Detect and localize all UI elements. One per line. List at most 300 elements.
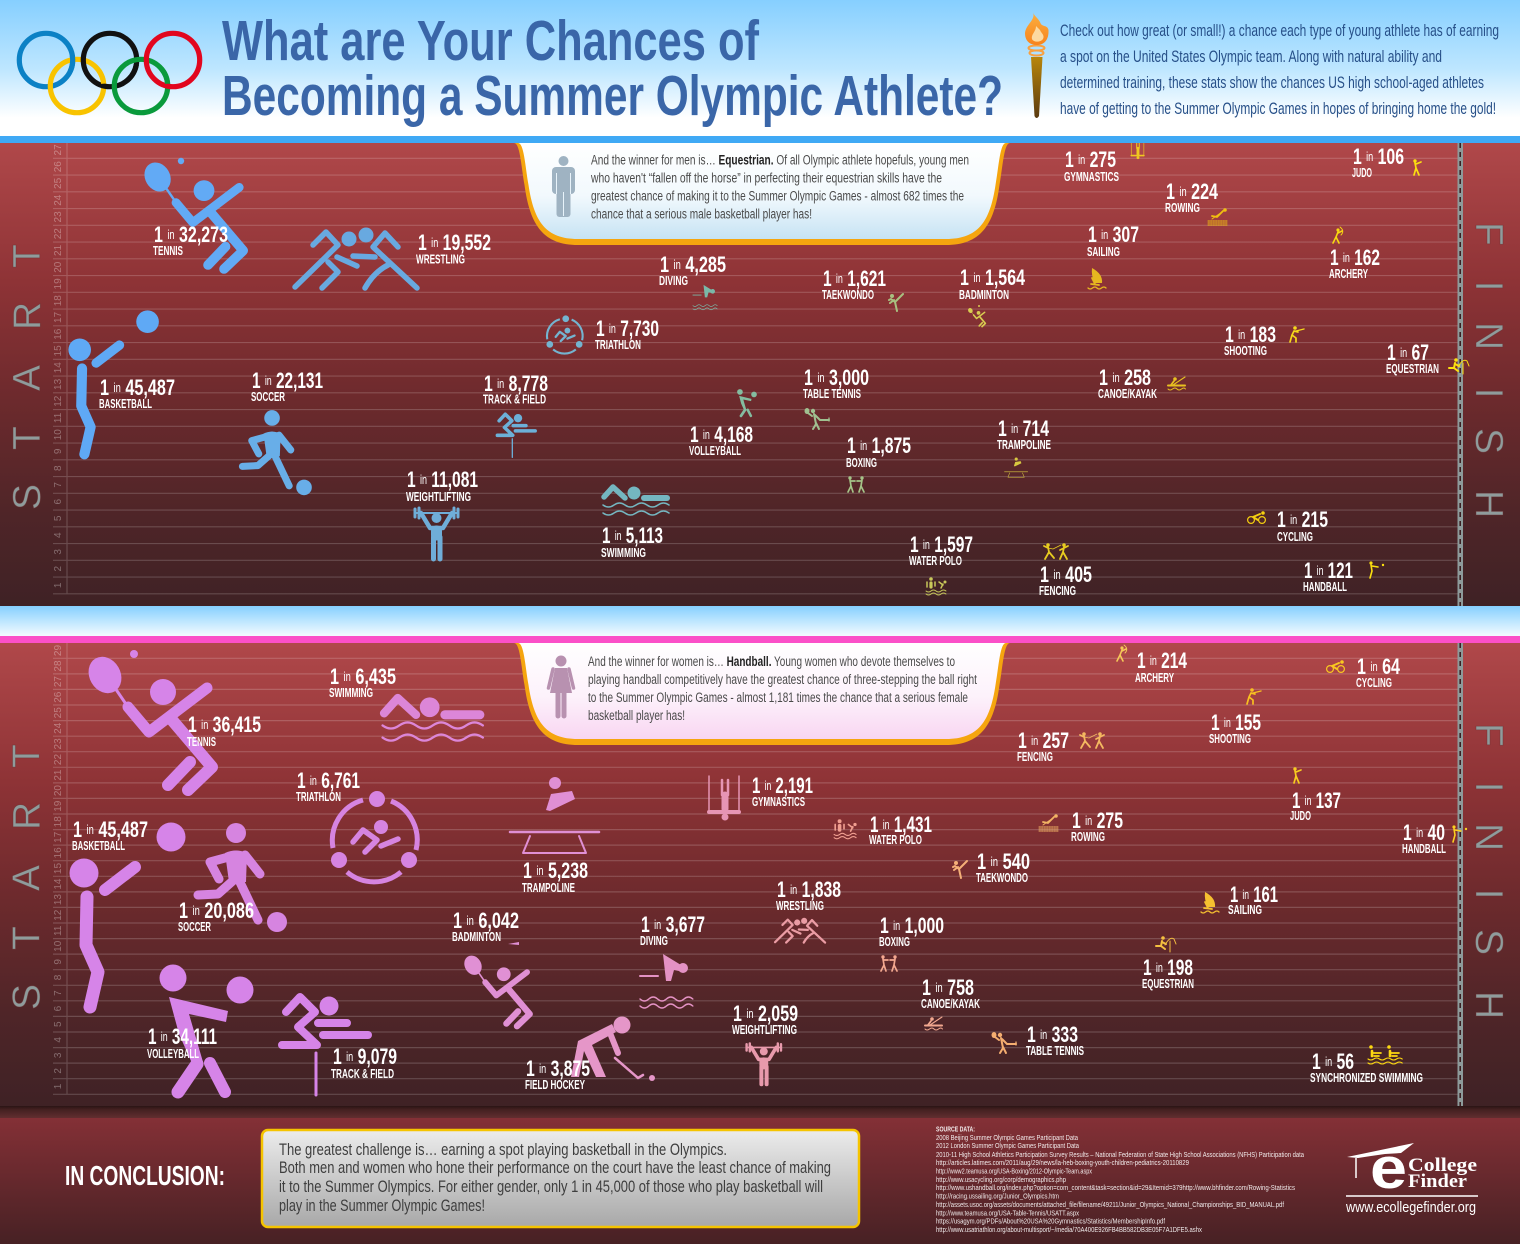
lane numbers: 9 — [53, 959, 64, 965]
sport: sailing — [1201, 882, 1278, 917]
lane numbers: 3 — [53, 549, 64, 555]
icon: table tennis — [992, 1032, 1016, 1053]
stat: basketball — [99, 375, 175, 411]
lane numbers: 25 — [53, 177, 64, 189]
lane numbers: 29 — [53, 645, 64, 656]
stat: fencing: FENCING — [1017, 750, 1053, 764]
sport: field hockey — [525, 1016, 655, 1092]
icon: shooting — [1247, 688, 1261, 704]
stat: wrestling — [776, 877, 841, 913]
source data: http://www.ushandball.org/index.php?option=com_content&task=section&id=29&Itemid=379http://www.bhfinder.com/Rowing-Statistics — [936, 1185, 1295, 1192]
icon: handball — [1369, 561, 1384, 578]
stat: fencing — [1017, 728, 1069, 764]
stat: taekwondo: 540 — [998, 849, 1030, 874]
stat: equestrian: 67 — [1407, 340, 1429, 365]
sport: handball — [1303, 558, 1384, 594]
stat: swimming: 1 — [602, 523, 615, 548]
stat: boxing: in — [860, 438, 867, 453]
sport: handball — [1402, 820, 1467, 856]
stat: weightlifting: 2,059 — [754, 1001, 798, 1026]
sport: shooting — [1224, 322, 1304, 358]
icon: boxing — [848, 476, 864, 492]
stat: sailing: SAILING — [1087, 245, 1120, 259]
sport: diving — [659, 252, 726, 310]
lane numbers: 24 — [53, 194, 64, 206]
source data: SOURCE DATA: — [936, 1126, 975, 1134]
icon: boxing — [881, 955, 897, 971]
sport: judo — [1352, 144, 1421, 180]
stat: swimming: 1 — [330, 664, 343, 689]
sport: fencing — [1039, 543, 1092, 598]
stat: tennis: 36,415 — [208, 712, 261, 737]
icon: cycling — [1248, 511, 1265, 523]
callout: women's winner — [514, 643, 1010, 745]
icon: synchronized swimming — [1368, 1045, 1402, 1064]
icon: olympic rings — [19, 33, 200, 113]
stat: table tennis — [1026, 1022, 1084, 1058]
stat: canoe: CANOE/KAYAK — [1098, 387, 1157, 401]
stat: fencing: FENCING — [1039, 584, 1076, 598]
stat: judo: 1 — [1292, 788, 1305, 813]
stat: diving: in — [654, 917, 661, 932]
stat: equestrian: EQUESTRIAN — [1142, 977, 1194, 991]
sport: boxing — [879, 913, 944, 971]
stat: wrestling: 1,838 — [797, 877, 841, 902]
stat: table tennis: 3,000 — [825, 365, 869, 390]
sport: taekwondo — [822, 266, 903, 311]
stat: handball: HANDBALL — [1402, 842, 1446, 856]
lane numbers: 2 — [53, 565, 64, 571]
sport: swimming — [329, 664, 483, 741]
sport: equestrian — [1142, 936, 1194, 991]
stat: badminton: in — [467, 913, 474, 928]
stat: soccer — [251, 368, 323, 404]
stat: boxing: 1,875 — [867, 433, 911, 458]
stat: canoe — [1098, 365, 1157, 401]
sport: canoe/kayak — [1098, 365, 1186, 401]
sport: badminton — [959, 265, 1025, 327]
lane numbers: 10 — [53, 429, 64, 440]
stat: judo: JUDO — [1290, 809, 1311, 823]
sport: wrestling — [295, 228, 491, 288]
stat: sailing — [1087, 222, 1139, 259]
sport: soccer — [178, 823, 287, 934]
stat: gymnastics: GYMNASTICS — [1064, 170, 1119, 184]
stat: gymnastics: 275 — [1085, 147, 1116, 172]
stat: basketball: 45,487 — [94, 817, 148, 842]
stat: canoe: in — [1112, 370, 1120, 385]
stat: cycling: CYCLING — [1277, 530, 1313, 544]
intro text — [1060, 21, 1499, 118]
lane numbers: 1 — [53, 1083, 64, 1089]
icon: wrestling — [295, 228, 417, 288]
stat: archery: ARCHERY — [1329, 267, 1368, 281]
stat: archery: 1 — [1137, 648, 1150, 673]
callout text: And the winner for men is… Equestrian. Of all Olympic athlete hopefuls, young men — [591, 152, 969, 168]
source data: http://racing.ussailing.org/Junior_Olympics.htm — [936, 1194, 1059, 1200]
sport: canoe/kayak — [921, 975, 980, 1030]
icon: sailing — [1088, 268, 1106, 289]
stat: tennis: TENNIS — [187, 735, 216, 749]
sport: table tennis — [803, 365, 869, 429]
divider band — [0, 606, 1520, 636]
stat: equestrian — [1386, 340, 1439, 376]
stat: archery: ARCHERY — [1135, 671, 1174, 685]
callout text: And the winner for women is… Handball. Young women who devote themselves to — [588, 654, 955, 669]
stat: diving: 1 — [660, 252, 673, 277]
stat: badminton: in — [973, 270, 981, 285]
stat: cycling: in — [1370, 659, 1378, 674]
stat: track and field: TRACK & FIELD — [483, 392, 546, 406]
stat: rowing — [1165, 179, 1218, 215]
stat: soccer: 1 — [179, 898, 192, 923]
stat: field hockey: FIELD HOCKEY — [525, 1078, 585, 1092]
lane numbers: 10 — [53, 940, 64, 952]
icon: water polo — [834, 819, 857, 839]
sport: triathlon — [546, 315, 659, 354]
finish label: FINISH — [1467, 222, 1510, 518]
stat: badminton: BADMINTON — [452, 930, 501, 944]
icon: volleyball — [160, 964, 254, 1092]
stat: triathlon: in — [609, 321, 616, 336]
stat: tennis: in — [167, 227, 175, 242]
sport: judo — [1290, 767, 1341, 823]
lane numbers: 12 — [53, 909, 64, 921]
stat: rowing: ROWING — [1071, 830, 1105, 844]
conclusion box: Both men and women who hone their performance on the court have the least chance of making — [279, 1158, 831, 1177]
source data: 2012 London Summer Olympic Games Participant Data — [936, 1143, 1079, 1150]
stat: wrestling: in — [431, 235, 438, 250]
stat: weightlifting: 1 — [407, 467, 420, 492]
stat: gymnastics: GYMNASTICS — [752, 795, 805, 809]
stat: judo — [1352, 144, 1404, 180]
icon: gymnastics — [709, 776, 739, 820]
stat: judo: 1 — [1353, 144, 1366, 169]
sport: diving — [640, 912, 705, 1008]
stat: swimming — [329, 664, 396, 700]
icon: male figure — [552, 156, 575, 217]
source data: http://www.usacycling.org/corp/demographics.php — [936, 1177, 1066, 1184]
stat: rowing: in — [1179, 184, 1187, 199]
stat: handball: HANDBALL — [1303, 580, 1347, 594]
stat: soccer: SOCCER — [251, 390, 285, 404]
stat: shooting: 183 — [1245, 322, 1276, 347]
stat: wrestling: 1 — [418, 230, 431, 255]
sport: triathlon — [296, 768, 417, 882]
icon: triathlon — [331, 791, 417, 882]
lane numbers: 24 — [53, 722, 64, 734]
stat: boxing: BOXING — [846, 456, 877, 470]
divider strip: blue — [0, 136, 1520, 143]
stat: judo — [1290, 788, 1341, 823]
stat: synchronized swimming: SYNCHRONIZED SWIMMING — [1310, 1071, 1423, 1085]
stat: rowing: 224 — [1187, 179, 1218, 204]
sport: fencing — [1017, 728, 1104, 764]
icon: wrestling — [775, 918, 825, 943]
callout text: basketball player has! — [588, 708, 685, 723]
stat: shooting: in — [1238, 327, 1245, 342]
callout text — [590, 152, 969, 222]
stat: table tennis: 1 — [1027, 1022, 1040, 1047]
stat: sailing — [1228, 882, 1278, 917]
icon: swimming — [603, 486, 669, 515]
icon: badminton — [967, 305, 985, 327]
sport: boxing — [846, 433, 911, 492]
sport: cycling — [1327, 654, 1400, 690]
logo: eCollege Finder: e — [1370, 1136, 1407, 1201]
lane numbers: 12 — [53, 395, 64, 407]
icon: triathlon — [546, 315, 583, 354]
lane numbers: 14 — [53, 878, 64, 890]
stat: swimming: 6,435 — [351, 664, 396, 689]
lane numbers: 8 — [53, 974, 64, 980]
icon: soccer — [198, 823, 287, 932]
lane numbers: 26 — [53, 691, 64, 703]
stat: diving — [640, 912, 705, 948]
sport: equestrian — [1386, 340, 1469, 376]
stat: equestrian: in — [1400, 345, 1407, 360]
start label: START — [6, 244, 49, 510]
stat: weightlifting: in — [420, 472, 427, 487]
lane numbers: 11 — [53, 412, 64, 423]
lane numbers: 28 — [53, 660, 64, 672]
stat: diving: 3,677 — [661, 912, 705, 937]
sport: soccer — [242, 368, 323, 495]
icon: weightlifting — [747, 1043, 781, 1084]
stat: wrestling: 1 — [777, 877, 790, 902]
stat: rowing: 275 — [1092, 808, 1123, 833]
stat: field hockey — [525, 1056, 590, 1092]
lane numbers: 18 — [53, 816, 64, 827]
stat: rowing: 1 — [1166, 179, 1179, 204]
icon: diving — [693, 285, 717, 310]
logo: eCollege Finder: Finder — [1408, 1171, 1468, 1192]
icon: tennis — [82, 650, 212, 790]
stat: badminton: 1 — [453, 908, 466, 933]
stat: trampoline: in — [1011, 421, 1018, 436]
sport: badminton — [452, 908, 530, 1026]
stat: taekwondo: in — [991, 854, 998, 869]
logo: eCollege Finder — [1345, 1136, 1478, 1216]
title: Becoming a Summer Olympic Athlete? — [222, 64, 1003, 128]
stat: basketball: in — [114, 380, 121, 395]
stat: trampoline: 1 — [998, 416, 1011, 441]
stat: canoe — [921, 975, 980, 1011]
stat: tennis: 1 — [154, 222, 167, 247]
stat: taekwondo: 1 — [977, 849, 990, 874]
sport: water polo — [834, 812, 932, 847]
stat: fencing: in — [1031, 733, 1038, 748]
lane numbers: 15 — [53, 863, 64, 874]
stat: badminton: BADMINTON — [959, 288, 1009, 302]
icon: fencing — [1080, 732, 1104, 748]
lane numbers: 5 — [53, 1021, 64, 1027]
stat: weightlifting — [406, 467, 478, 504]
stat: triathlon: 1 — [596, 316, 609, 341]
stat: basketball: 1 — [73, 817, 86, 842]
stat: archery — [1135, 648, 1187, 685]
stat: table tennis: TABLE TENNIS — [803, 387, 861, 401]
stat: volleyball: 1 — [690, 422, 703, 447]
stat: boxing: in — [893, 918, 900, 933]
stat: canoe: CANOE/KAYAK — [921, 997, 980, 1011]
lane numbers: 7 — [53, 990, 64, 996]
stat: wrestling: in — [790, 882, 797, 897]
stat: tennis — [153, 222, 228, 258]
stat: table tennis: TABLE TENNIS — [1026, 1044, 1084, 1058]
lane numbers: 20 — [53, 785, 64, 796]
icon: soccer — [242, 410, 312, 495]
stat: shooting: 155 — [1231, 710, 1261, 735]
stat: trampoline — [997, 416, 1051, 452]
sport: archery — [1329, 227, 1380, 281]
stat: fencing — [1039, 562, 1092, 598]
stat: handball: 1 — [1403, 820, 1416, 845]
icon: diving — [640, 954, 693, 1008]
conclusion box: it to the Summer Olympics. For either gender, only 1 in 45,000 of those who play basketball will — [279, 1177, 823, 1196]
stat: shooting: 1 — [1211, 710, 1224, 735]
callout text: who haven't “fallen off the horse” in perfecting their equestrian skills have the — [590, 170, 942, 186]
source data: http://www.usatriathlon.org/about-multisport/~/media/70A400E926FB4BB582DB3E05F7A1DFE5.ashx — [936, 1227, 1202, 1234]
stat: water polo — [869, 812, 932, 847]
stat: diving: DIVING — [659, 274, 688, 288]
icon: equestrian — [1156, 936, 1176, 952]
icon: shooting — [1290, 326, 1304, 342]
source data: 2008 Beijing Summer Olympic Games Participant Data — [936, 1135, 1078, 1142]
stat: sailing: 307 — [1108, 222, 1139, 247]
stat: canoe: 758 — [943, 975, 974, 1000]
stat: soccer: 20,086 — [200, 898, 254, 923]
stat: fencing: 257 — [1038, 728, 1069, 753]
stat: soccer: 22,131 — [272, 368, 323, 393]
stat: taekwondo — [822, 266, 886, 302]
lane numbers: 19 — [53, 278, 64, 289]
stat: gymnastics: 1 — [1065, 147, 1078, 172]
lane numbers: 17 — [53, 311, 64, 323]
stat: weightlifting: WEIGHTLIFTING — [732, 1023, 797, 1037]
stat: sailing: 1 — [1230, 882, 1243, 907]
callout text — [588, 654, 977, 723]
icon: track and field — [282, 996, 368, 1095]
stat: equestrian: in — [1156, 960, 1163, 975]
stat: volleyball: 4,168 — [710, 422, 753, 447]
conclusion box: The greatest challenge is… earning a spot playing basketball in the Olympics. — [279, 1140, 727, 1159]
panel: men — [0, 140, 1520, 606]
stat: basketball — [72, 817, 148, 853]
lane numbers: 16 — [53, 328, 64, 340]
stat: canoe: in — [935, 980, 943, 995]
icon: field hockey — [571, 1016, 655, 1081]
stat: water polo: WATER POLO — [909, 554, 962, 568]
source data: http://www2.teamusa.org/USA-Boxing/2012-Olympic-Team.aspx — [936, 1168, 1092, 1176]
stat: badminton — [452, 908, 519, 944]
lane numbers: 4 — [53, 532, 64, 538]
icon: female figure — [548, 656, 574, 716]
icon: judo — [1293, 767, 1301, 783]
lane numbers: 13 — [53, 894, 64, 905]
stat: track and field: 9,079 — [353, 1044, 397, 1069]
stat: water polo: 1 — [910, 532, 923, 557]
lane numbers: 6 — [53, 1005, 64, 1011]
stat: sailing: in — [1242, 887, 1249, 902]
stat: wrestling: WRESTLING — [416, 252, 465, 266]
icon: judo — [1413, 159, 1421, 175]
stat: cycling: CYCLING — [1356, 676, 1392, 690]
source data — [936, 1126, 1304, 1234]
stat: volleyball: 1 — [148, 1024, 161, 1049]
source data: https://usagym.org/PDFs/About%20USA%20Gymnastics/Statistics/MembershipInfo.pdf — [936, 1218, 1165, 1226]
lane numbers: 5 — [53, 515, 64, 521]
stat: equestrian: EQUESTRIAN — [1386, 362, 1439, 376]
stat: field hockey: in — [539, 1061, 546, 1076]
stat: diving: 4,285 — [681, 252, 726, 277]
stat: taekwondo: 1 — [823, 266, 836, 291]
stat: shooting — [1224, 322, 1276, 358]
stat: basketball: in — [87, 822, 94, 837]
stat: volleyball: VOLLEYBALL — [689, 444, 741, 458]
divider strip: pink — [0, 636, 1520, 643]
stat: archery: in — [1343, 250, 1350, 265]
lane numbers: 7 — [53, 482, 64, 488]
stat: taekwondo: TAEKWONDO — [822, 288, 874, 302]
finish label: FINISH — [1467, 723, 1510, 1019]
conclusion box — [262, 1130, 859, 1227]
panel: women — [0, 643, 1520, 1106]
stat: volleyball: in — [161, 1029, 168, 1044]
icon: canoe — [1168, 377, 1186, 390]
stat: track and field: 1 — [333, 1044, 346, 1069]
stat: cycling: 1 — [1357, 654, 1370, 679]
lane numbers: 27 — [53, 676, 64, 687]
stat: fencing: 1 — [1018, 728, 1031, 753]
footer panel — [0, 1106, 1520, 1244]
icon: basketball — [68, 310, 159, 454]
stat: triathlon — [296, 768, 360, 804]
icon: taekwondo — [953, 861, 967, 878]
stat: trampoline: 5,238 — [544, 858, 588, 883]
stat: judo: in — [1305, 793, 1311, 808]
stat: cycling — [1356, 654, 1400, 690]
lane numbers: 11 — [53, 925, 64, 936]
lane numbers: 8 — [53, 465, 64, 471]
stat: canoe: 1 — [1099, 365, 1112, 390]
sport: tennis — [139, 158, 243, 269]
title: What are Your Chances of — [222, 9, 760, 73]
stat: cycling: 1 — [1277, 507, 1290, 532]
stat: weightlifting: in — [746, 1006, 754, 1021]
stat: triathlon: TRIATHLON — [595, 338, 641, 352]
header band — [0, 0, 1520, 137]
callout text: greatest chance of making it to the Summer Olympic Games - almost 682 times the — [591, 188, 964, 204]
icon: rowing — [1039, 814, 1058, 831]
stat: gymnastics — [752, 773, 813, 809]
stat: wrestling: 19,552 — [438, 230, 491, 255]
stat: archery: 214 — [1157, 648, 1187, 673]
icon: trampoline — [510, 777, 599, 853]
lane numbers: 15 — [53, 345, 64, 356]
stat: field hockey: 3,875 — [546, 1056, 590, 1081]
lane numbers — [53, 645, 64, 1089]
stat: basketball: 1 — [100, 375, 113, 400]
lane numbers — [53, 144, 64, 588]
stat: table tennis: 1 — [804, 365, 817, 390]
lane numbers: 13 — [53, 378, 64, 390]
stat: handball: 40 — [1423, 820, 1445, 845]
callout text: chance that a serious male basketball player has! — [591, 206, 812, 222]
stat: table tennis: in — [817, 370, 825, 385]
stat: tennis — [187, 712, 261, 749]
sport: rowing — [1039, 808, 1123, 844]
